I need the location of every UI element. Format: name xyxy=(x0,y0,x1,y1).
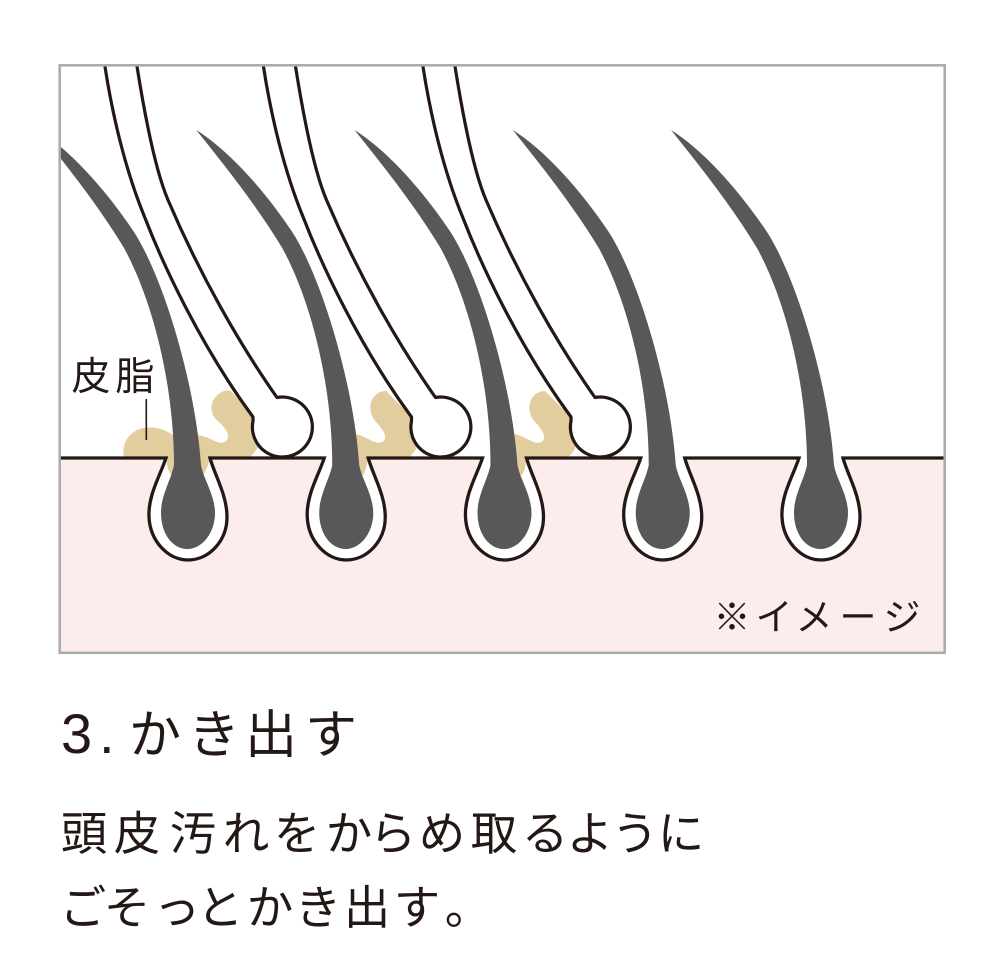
heading: 3. xyxy=(61,702,115,765)
sebum deposits xyxy=(123,390,579,475)
label: sebum xyxy=(71,356,155,440)
skin background xyxy=(60,458,945,653)
scalp surface line xyxy=(58,458,946,560)
heading: かき出す xyxy=(129,707,357,765)
label: sebum: 皮脂 xyxy=(71,356,155,399)
body text: 頭皮汚れをからめ取るように xyxy=(61,808,704,860)
follicle cavities xyxy=(149,458,860,560)
body text: ごそっとかき出す。 xyxy=(60,882,491,934)
hairs xyxy=(38,130,848,549)
comb tines xyxy=(104,60,630,457)
panel border xyxy=(60,65,945,653)
note: image only: ※イメージ xyxy=(714,597,920,638)
panel: scalp diagram xyxy=(38,60,946,653)
body text xyxy=(60,808,704,934)
